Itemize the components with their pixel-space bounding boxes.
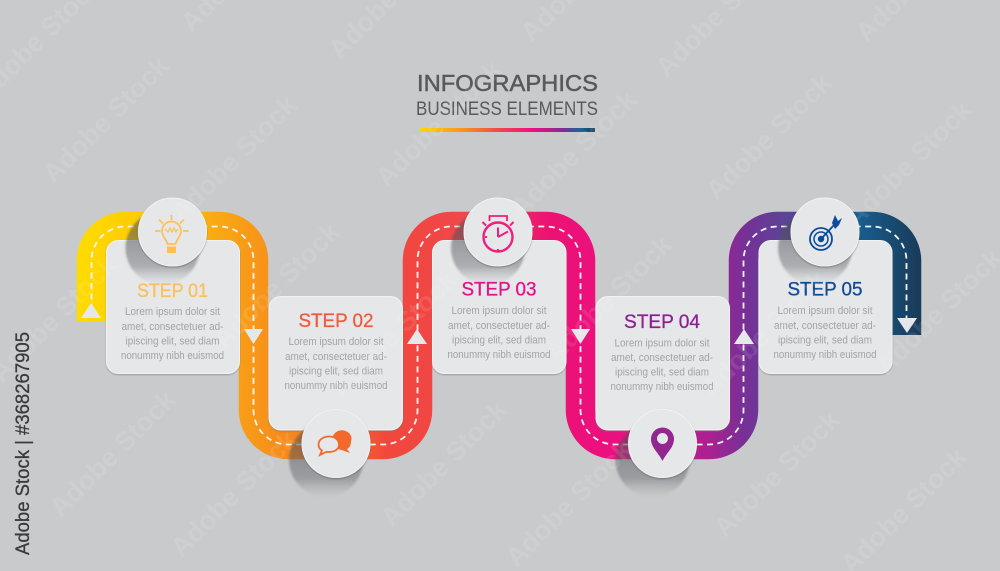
direction arrows xyxy=(81,303,917,344)
body text xyxy=(284,336,388,392)
ribbon path xyxy=(92,226,906,444)
body text: nonummy nibh euismod xyxy=(774,349,877,361)
body text: nonummy nibh euismod xyxy=(610,381,714,393)
card xyxy=(759,240,892,374)
arrow: down end xyxy=(897,318,917,333)
watermark pattern: Adobe Stock xyxy=(165,424,303,563)
watermark pattern: Adobe Stock xyxy=(840,94,978,233)
body text xyxy=(448,305,551,361)
card xyxy=(596,296,730,430)
panel: step 03 xyxy=(432,198,566,374)
watermark pattern: Adobe Stock xyxy=(540,229,678,368)
body text: nonummy nibh euismod xyxy=(448,349,551,361)
circle shadow xyxy=(126,211,200,285)
body text: Lorem ipsum dolor sit xyxy=(288,336,384,348)
watermark pattern: Adobe Stock xyxy=(165,89,303,228)
body text: nonummy nibh euismod xyxy=(121,350,224,362)
card xyxy=(269,296,402,430)
body text: amet, consectetuer ad- xyxy=(774,320,876,332)
watermark pattern: Adobe Stock xyxy=(505,84,643,223)
heading: STEP 04 xyxy=(624,311,700,333)
watermark pattern: Adobe Stock xyxy=(500,434,638,571)
card xyxy=(432,240,566,374)
panel: step 05 xyxy=(759,198,892,374)
arrow: up 2 xyxy=(407,329,427,344)
body text: Lorem ipsum dolor sit xyxy=(452,305,547,317)
heading: STEP 03 xyxy=(462,278,536,300)
icon: target and arrow xyxy=(810,215,842,250)
body text: amet, consectetuer ad- xyxy=(448,320,550,332)
circle shadow xyxy=(616,423,690,497)
watermark pattern: Adobe Stock xyxy=(695,264,833,403)
icon: speech bubbles xyxy=(318,430,352,455)
watermark pattern: Adobe Stock xyxy=(325,264,463,403)
subtitle: business elements: BUSINESS ELEMENTS xyxy=(416,98,598,120)
arrow: down 3 xyxy=(571,329,590,344)
body text: Lorem ipsum dolor sit xyxy=(778,305,873,317)
title block xyxy=(416,70,598,132)
watermark pattern: Adobe Stock xyxy=(700,67,838,206)
body text: ipiscing elit, sed diam xyxy=(126,336,220,348)
watermark pattern: Adobe Stock xyxy=(375,394,513,533)
circle badge xyxy=(302,410,370,478)
body text: ipiscing elit, sed diam xyxy=(615,366,709,378)
circle shadow xyxy=(778,211,852,285)
watermark pattern: Adobe Stock xyxy=(44,384,182,523)
circle badge xyxy=(628,410,696,478)
heading: STEP 02 xyxy=(298,310,374,332)
arrow: down 1 xyxy=(244,329,263,344)
icon: location pin xyxy=(651,428,674,461)
body text: Lorem ipsum dolor sit xyxy=(125,306,220,318)
heading: STEP 01 xyxy=(137,280,208,302)
icon: light bulb xyxy=(155,215,188,253)
panel: step 01 xyxy=(106,198,240,374)
arrow: up start xyxy=(81,303,101,318)
watermark pattern: Adobe Stock xyxy=(708,404,846,543)
watermark pattern: Adobe Stock xyxy=(208,216,346,355)
body text: amet, consectetuer ad- xyxy=(611,352,713,364)
circle shadow xyxy=(451,211,525,285)
body text: ipiscing elit, sed diam xyxy=(289,366,383,378)
body text: amet, consectetuer ad- xyxy=(122,321,224,333)
body text xyxy=(774,305,877,361)
watermark pattern: Adobe Stock xyxy=(370,54,508,193)
card xyxy=(106,240,240,374)
circle badge xyxy=(464,198,532,266)
circle badge xyxy=(138,198,206,266)
body text: ipiscing elit, sed diam xyxy=(778,334,872,346)
dashed centre line xyxy=(92,226,906,444)
circle shadow xyxy=(289,423,363,497)
icon: stopwatch xyxy=(482,216,514,252)
body text: nonummy nibh euismod xyxy=(284,380,388,392)
arrow: up 4 xyxy=(734,329,754,344)
body text xyxy=(610,338,714,393)
stock id side label: Adobe Stock | #368267905 xyxy=(13,332,34,555)
heading: STEP 05 xyxy=(788,278,863,300)
panel: step 04 xyxy=(596,296,730,497)
body text: Lorem ipsum dolor sit xyxy=(614,338,710,350)
panel: step 02 xyxy=(269,296,402,497)
body text: ipiscing elit, sed diam xyxy=(452,334,546,346)
watermark pattern: Adobe Stock xyxy=(37,50,175,189)
circle badge xyxy=(791,198,859,266)
body text xyxy=(121,306,224,362)
body text: amet, consectetuer ad- xyxy=(285,351,387,363)
title: infographics: INFOGRAPHICS xyxy=(417,70,598,96)
title gradient bar xyxy=(420,128,595,132)
